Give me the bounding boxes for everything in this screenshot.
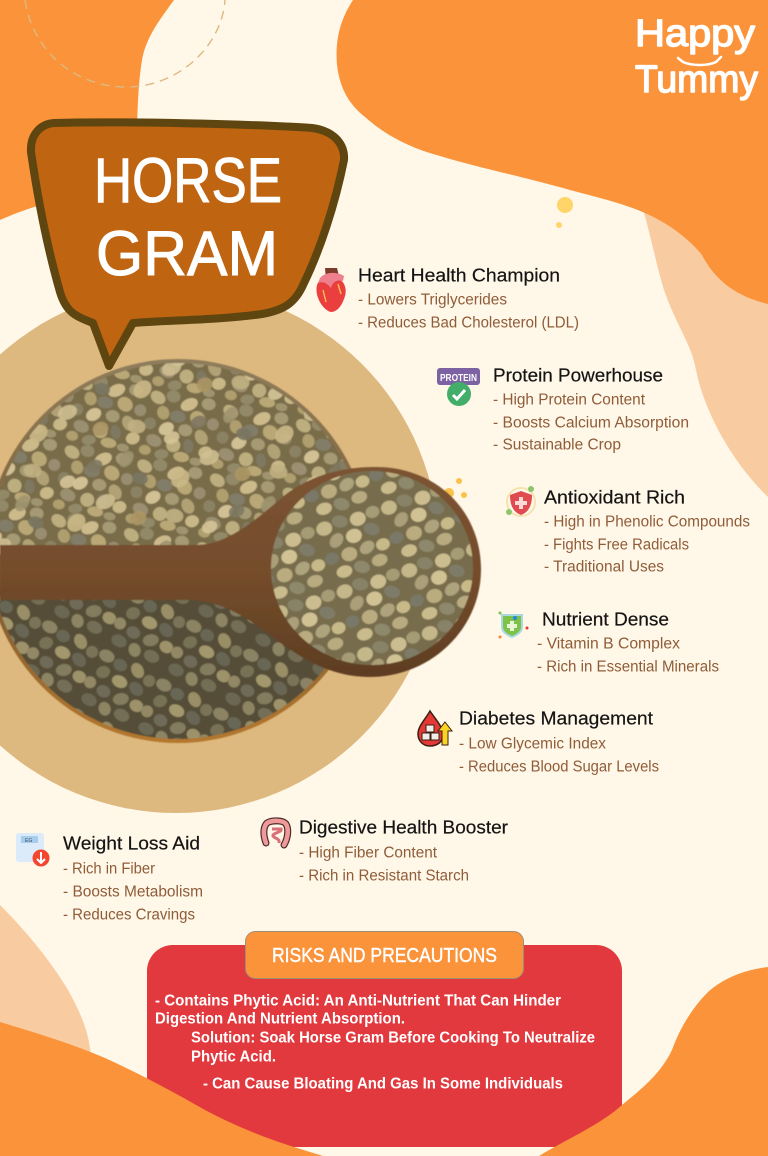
spoon beans	[265, 465, 480, 670]
decorative shape: peach right blob	[642, 206, 768, 497]
icon: scale with down arrow: EG	[25, 838, 32, 844]
benefit: heart health: - Reduces Bad Cholesterol (LDL)	[358, 314, 579, 331]
panel: risks and precautions	[147, 932, 622, 1147]
benefit: diabetes: Diabetes Management	[459, 707, 653, 728]
benefit: nutrient dense: Nutrient Dense	[542, 608, 669, 629]
benefit: weight loss: - Boosts Metabolism	[63, 883, 203, 900]
icon: scale with down arrow	[16, 833, 50, 866]
benefit: nutrient dense	[498, 608, 719, 675]
risk text: Phytic Acid.	[191, 1048, 276, 1066]
icon: protein badge with check: PROTEIN	[440, 372, 477, 384]
decorative dots near spoon	[444, 478, 467, 498]
beans in bowl	[0, 362, 348, 740]
benefit: antioxidant: Antioxidant Rich	[544, 486, 685, 507]
benefit: diabetes: - Reduces Blood Sugar Levels	[459, 758, 659, 775]
tan circle behind bowl	[0, 287, 439, 813]
logo: Happy Tummy: Tummy	[635, 59, 758, 101]
benefit: digestive: Digestive Health Booster	[299, 816, 508, 837]
benefit: weight loss: - Rich in Fiber	[63, 860, 155, 877]
benefit: antioxidant: - Fights Free Radicals	[544, 536, 689, 553]
benefit: heart health: Heart Health Champion	[358, 264, 560, 285]
decorative dashed arc	[25, 0, 225, 87]
icon: protein badge with check	[437, 368, 480, 406]
icon: heart	[316, 268, 346, 312]
decorative shape: bottom-right orange wave	[539, 967, 768, 1156]
decorative shape: bottom-left peach blob	[0, 905, 91, 1060]
title text: HORSE	[94, 146, 282, 216]
icon: blood drop with arrow	[418, 711, 452, 746]
benefit: diabetes: - Low Glycemic Index	[459, 735, 606, 752]
benefit: protein	[437, 364, 689, 453]
benefit: weight loss: Weight Loss Aid	[63, 832, 200, 853]
benefit: protein: - High Protein Content	[493, 391, 646, 408]
icon: intestines	[264, 821, 288, 845]
benefit: digestive	[264, 816, 508, 884]
icon: green shield	[498, 612, 528, 638]
risk text: Digestion And Nutrient Absorption.	[155, 1010, 405, 1028]
benefit: protein: Protein Powerhouse	[493, 364, 663, 385]
logo: Happy Tummy: Happy	[635, 13, 755, 55]
benefit: antioxidant	[506, 486, 750, 575]
logo: Happy Tummy	[635, 13, 758, 101]
risk text	[155, 992, 595, 1092]
panel heading	[246, 932, 524, 978]
risk text: - Can Cause Bloating And Gas In Some Individuals	[203, 1076, 563, 1092]
benefit: weight loss: - Reduces Cravings	[63, 906, 195, 923]
spoon	[0, 467, 481, 677]
benefit: nutrient dense: - Rich in Essential Minerals	[537, 658, 719, 675]
benefit: protein: - Boosts Calcium Absorption	[493, 414, 689, 431]
benefit: antioxidant: - Traditional Uses	[544, 558, 664, 575]
title text: GRAM	[96, 219, 278, 289]
benefit: heart health	[316, 264, 579, 331]
decorative shape: top-right orange blob	[337, 0, 768, 304]
decorative yellow dots	[556, 197, 573, 228]
bowl rim	[0, 359, 370, 743]
benefit: digestive: - Rich in Resistant Starch	[299, 867, 469, 884]
benefit: heart health: - Lowers Triglycerides	[358, 291, 507, 308]
benefit: digestive: - High Fiber Content	[299, 844, 438, 861]
risk text: - Contains Phytic Acid: An Anti-Nutrient That Can Hinder	[155, 992, 561, 1010]
benefit: antioxidant: - High in Phenolic Compounds	[544, 513, 750, 530]
decorative shape: bottom-left orange wave	[0, 1022, 323, 1156]
title text	[94, 146, 282, 289]
decorative shape: top-left orange blob	[0, 0, 174, 220]
panel heading: RISKS AND PRECAUTIONS	[272, 945, 497, 967]
icon: shield	[506, 486, 535, 516]
title speech bubble	[31, 122, 344, 366]
benefit: diabetes	[418, 707, 659, 775]
benefit: weight loss	[16, 832, 203, 923]
risk text: Solution: Soak Horse Gram Before Cooking To Neutralize	[191, 1030, 595, 1046]
photo: bowl of horse gram with wooden spoon	[0, 355, 481, 750]
benefit: nutrient dense: - Vitamin B Complex	[537, 635, 680, 652]
benefit: protein: - Sustainable Crop	[493, 436, 621, 453]
